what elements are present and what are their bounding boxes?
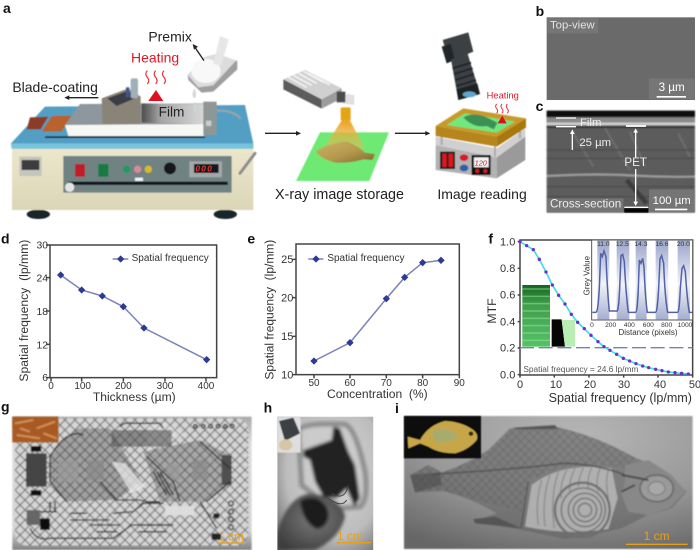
- small heating indicator: Heating: [487, 90, 519, 100]
- blade coating machine: [11, 78, 255, 219]
- black base marker: [624, 207, 648, 213]
- panel f: MTF chart: [485, 231, 700, 405]
- x axis labels: 50: [308, 378, 320, 389]
- plot frame and ticks: [518, 240, 693, 378]
- panel label i: i: [395, 400, 399, 416]
- label PET with arrows: PET: [624, 156, 647, 169]
- device radiograph: [277, 416, 374, 550]
- annotation spatial frequency value: Spatial frequency = 24.6 lp/mm: [523, 364, 638, 374]
- panel label h: h: [264, 399, 272, 415]
- mortar and pestle: [188, 36, 237, 113]
- panel label a: a: [3, 0, 11, 16]
- y axis labels: 0.6: [500, 290, 515, 302]
- grey value inset chart: [582, 240, 693, 337]
- grey value inset chart: Distance (pixels): [618, 328, 678, 337]
- x-ray source and fish on storage film: [283, 70, 389, 181]
- hot plate reader: [436, 108, 526, 178]
- green resolution target inset: [522, 285, 575, 347]
- panel label d: d: [1, 230, 10, 246]
- caption x-ray image storage: X-ray image storage: [275, 187, 404, 203]
- hot plate readout: 120: [475, 158, 488, 167]
- x axis labels: 20: [584, 379, 596, 391]
- x axis labels: [517, 379, 700, 391]
- panel d: spatial frequency vs thickness chart: [1, 230, 217, 404]
- caption image reading: Image reading: [437, 186, 527, 202]
- x axis title: Thickness (µm): [93, 390, 176, 404]
- x axis labels: 90: [454, 378, 465, 389]
- heating indicator: [131, 50, 179, 101]
- grey value inset chart: 20.0: [677, 241, 690, 248]
- y axis labels: 20: [281, 292, 293, 304]
- grey value inset chart: 600: [643, 322, 654, 329]
- panel i: fish X-ray image: [395, 400, 693, 549]
- label film: Film: [159, 105, 184, 120]
- arrow one: [265, 131, 301, 136]
- plot frame and ticks: [293, 244, 459, 378]
- panel label g: g: [1, 398, 10, 414]
- y axis labels: 0.2: [500, 343, 515, 355]
- scale bar 100 micrometres: 100 µm: [653, 195, 691, 207]
- y axis labels: 25: [281, 254, 293, 266]
- grey value inset chart: 1000: [678, 322, 693, 329]
- grey value inset chart: 0: [590, 322, 594, 329]
- x axis title: Concentration (%): [327, 387, 428, 401]
- PCB photo inset: [12, 417, 58, 442]
- grey value inset chart: 400: [624, 322, 635, 329]
- label PET with arrows: [624, 128, 647, 206]
- label premix with arrow: Premix: [148, 28, 192, 44]
- x axis labels: 400: [198, 381, 215, 392]
- x axis labels: [308, 378, 465, 389]
- panel label f: f: [488, 231, 493, 247]
- y axis labels: 24: [36, 274, 48, 285]
- threshold dashed line: [520, 346, 693, 350]
- x axis labels: 80: [417, 378, 429, 389]
- circuit board radiograph: [12, 417, 252, 550]
- fish photo inset: [404, 416, 481, 458]
- y axis title: Spatial frequency (lp/mm): [262, 240, 276, 380]
- y axis labels: [500, 236, 515, 381]
- x axis labels: 100: [74, 381, 91, 392]
- grey value inset chart: 16.6: [655, 241, 669, 248]
- y axis labels: 30: [36, 241, 48, 252]
- panel label b: b: [536, 3, 544, 19]
- MTF curve with dots: [518, 240, 690, 376]
- legend: Spatial frequency: [327, 253, 404, 264]
- x axis labels: 70: [381, 378, 392, 389]
- heating indicator: Heating: [131, 50, 179, 66]
- x axis labels: 10: [550, 379, 562, 391]
- camera: [442, 32, 480, 100]
- y axis labels: 12: [36, 340, 48, 351]
- grey value inset chart: 14.3: [634, 241, 648, 248]
- label premix with arrow: [148, 28, 204, 61]
- panel a: preparation and imaging schematic: [3, 0, 527, 219]
- label box top-view: Top-view: [550, 19, 596, 31]
- scale bar 1 cm: [626, 529, 688, 545]
- x axis labels: 200: [115, 381, 132, 392]
- device photo inset: [277, 417, 301, 453]
- cross-section image: [547, 111, 695, 213]
- micrograph background: [547, 17, 695, 100]
- y axis title: MTF: [485, 298, 499, 324]
- display digits: 000: [195, 164, 213, 174]
- y axis labels: 1.0: [500, 236, 515, 248]
- label blade-coating with arrow: Blade-coating: [12, 79, 98, 95]
- y axis labels: [281, 254, 293, 381]
- arrow two: [395, 131, 430, 136]
- y axis labels: 0.0: [500, 369, 515, 381]
- scale bar 1 cm: 1 cm: [218, 529, 244, 543]
- x axis labels: 60: [344, 378, 356, 389]
- x axis labels: 300: [157, 381, 174, 392]
- label cross-section: Cross-section: [550, 197, 621, 210]
- data line: [57, 271, 210, 363]
- arrow 25 micrometres: [570, 129, 575, 150]
- panel b: top-view micrograph: [536, 3, 695, 100]
- x axis labels: 40: [654, 379, 666, 391]
- grey value inset chart: 12.5: [616, 241, 629, 248]
- grey value inset chart: 11.0: [597, 241, 610, 248]
- data line: [310, 257, 445, 365]
- panel g: circuit board X-ray image: [1, 398, 252, 550]
- y axis labels: 15: [281, 331, 293, 343]
- film thickness markers: [556, 118, 646, 127]
- panel label c: c: [536, 98, 544, 114]
- x axis title: Spatial frequency (lp/mm): [549, 391, 692, 405]
- panel label e: e: [247, 231, 255, 247]
- plot frame and ticks: [46, 245, 217, 382]
- panel e: spatial frequency vs concentration chart: [247, 231, 465, 401]
- label 25 micrometres: 25 µm: [579, 137, 611, 149]
- scale bar 1 cm: 1 cm: [337, 529, 363, 543]
- small heating indicator: [487, 90, 519, 123]
- scale bar 3 micrometres: [649, 78, 694, 99]
- x axis labels: [48, 381, 215, 392]
- fish radiograph: [404, 416, 693, 549]
- panel c: cross-section micrograph: [536, 98, 695, 213]
- x axis labels: 0: [48, 381, 54, 392]
- y axis labels: 0.4: [500, 316, 515, 328]
- x axis labels: 30: [618, 379, 630, 391]
- y axis labels: 0.8: [500, 263, 515, 275]
- grey value inset chart: 800: [661, 322, 672, 329]
- grey value inset chart: Grey Value: [582, 255, 591, 295]
- y axis labels: 18: [36, 307, 48, 318]
- y axis labels: [36, 241, 48, 384]
- y axis labels: 6: [42, 373, 48, 384]
- legend: Spatial frequency: [132, 253, 209, 264]
- y axis labels: 10: [281, 369, 293, 381]
- scale bar 1 cm: 1 cm: [644, 529, 670, 543]
- label film: Film: [580, 117, 601, 129]
- scale bar 100 micrometres: [649, 189, 694, 212]
- y axis title: Spatial frequency (lp/mm): [17, 240, 31, 382]
- x axis labels: 0: [517, 379, 523, 391]
- panel h: device X-ray image: [264, 399, 373, 550]
- scale bar 3 micrometres: 3 µm: [659, 81, 685, 94]
- grey value inset chart: 200: [605, 322, 617, 329]
